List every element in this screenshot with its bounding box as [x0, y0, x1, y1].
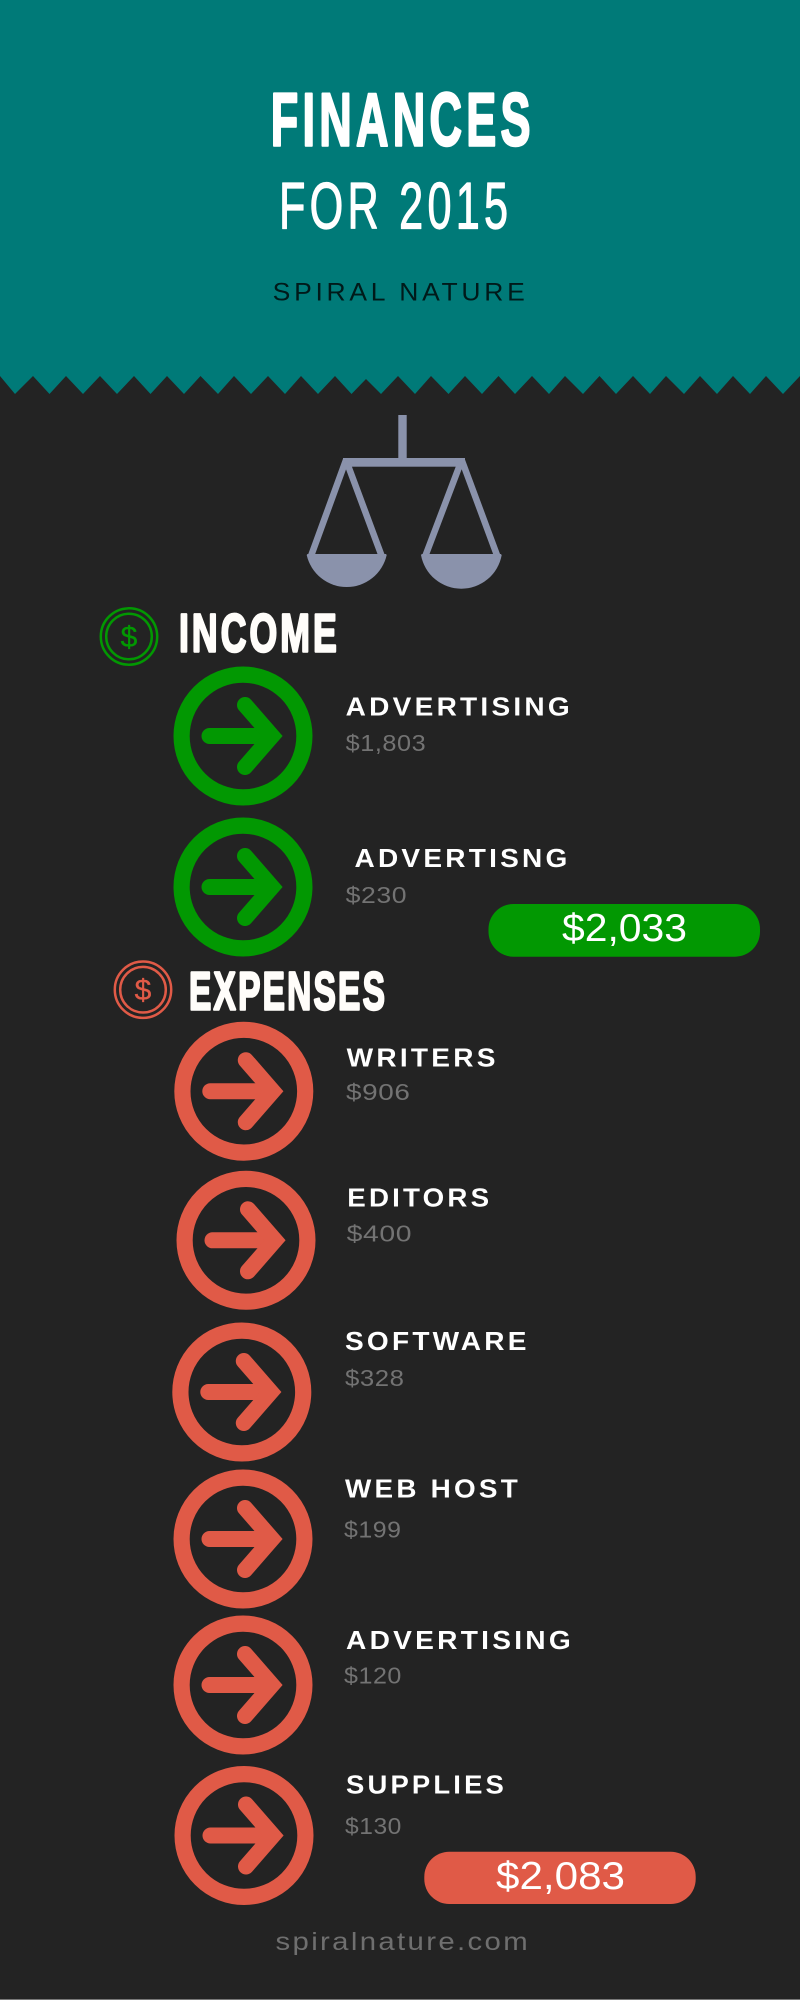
icon: red arrow circle — [182, 1624, 304, 1746]
expense row: editors — [185, 1179, 492, 1302]
amount: $328 — [345, 1365, 404, 1391]
label: ADVERTISNG — [354, 843, 570, 873]
expense row: web host — [182, 1473, 521, 1600]
label: WEB HOST — [345, 1473, 521, 1503]
heading: income: INCOME — [179, 603, 337, 663]
icon: expenses coin — [115, 962, 171, 1018]
label: SUPPLIES — [346, 1770, 507, 1800]
title: FOR 2015 — [279, 169, 508, 243]
header banner with zigzag edge — [0, 0, 800, 394]
income total pill — [488, 904, 760, 957]
subtitle: SPIRAL NATURE — [273, 279, 528, 307]
expense row: supplies — [183, 1770, 507, 1897]
income row: advertising — [182, 675, 573, 797]
title: FINANCES — [271, 79, 531, 162]
income row: advertisng — [182, 826, 570, 948]
icon: expenses coin: $ — [135, 974, 152, 1007]
amount: $400 — [347, 1221, 412, 1247]
icon: red arrow circle — [182, 1478, 304, 1600]
icon: red arrow circle — [183, 1774, 305, 1897]
amount: $230 — [346, 882, 407, 908]
icon: balance scale — [307, 415, 502, 589]
label: EDITORS — [347, 1183, 492, 1213]
icon: income coin: $ — [121, 621, 138, 654]
amount: $199 — [344, 1517, 402, 1543]
heading: expenses: EXPENSES — [189, 960, 385, 1022]
label: SOFTWARE — [345, 1326, 530, 1356]
label: ADVERTISING — [346, 1625, 574, 1655]
expense row: advertising — [182, 1624, 574, 1746]
amount: $130 — [345, 1813, 402, 1839]
icon: income coin — [101, 608, 157, 665]
income total pill: $2,033 — [562, 907, 687, 950]
icon: red arrow circle — [185, 1179, 307, 1302]
expenses total pill — [424, 1852, 696, 1904]
title — [271, 79, 530, 243]
expenses total pill: $2,083 — [496, 1855, 625, 1898]
label: WRITERS — [347, 1043, 499, 1073]
icon: green arrow circle — [182, 826, 304, 948]
expense row: writers — [182, 1030, 499, 1153]
amount: $120 — [344, 1663, 402, 1689]
icon: red arrow circle — [182, 1030, 305, 1153]
amount: $906 — [346, 1079, 410, 1105]
amount: $1,803 — [346, 730, 426, 756]
icon: green arrow circle — [182, 675, 304, 797]
expense row: software — [180, 1326, 530, 1453]
icon: red arrow circle — [180, 1331, 303, 1453]
label: ADVERTISING — [346, 692, 573, 722]
footer url: spiralnature.com — [276, 1928, 530, 1956]
